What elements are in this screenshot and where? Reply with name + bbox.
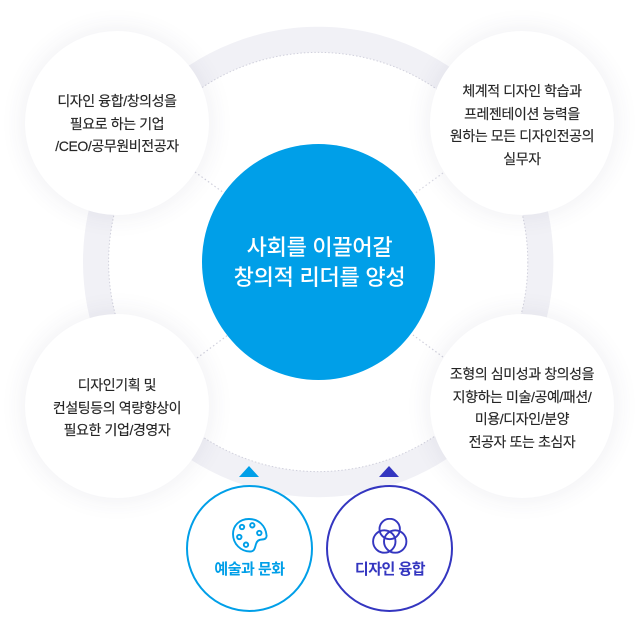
icon: overlapping circles xyxy=(372,518,408,554)
panel: top-right audience xyxy=(430,31,614,215)
center circle: main goal: 창의적 리더를 양성 xyxy=(234,264,405,290)
panel: bottom-right audience xyxy=(430,314,614,498)
panel: bottom-right audience: 조형의 심미성과 창의성을 xyxy=(450,366,594,382)
panel: top-right audience: 체계적 디자인 학습과 xyxy=(462,83,582,99)
badge: design convergence xyxy=(326,485,453,612)
panel: bottom-left audience: 필요한 기업/경영자 xyxy=(64,422,170,438)
panel: top-left audience: 디자인 융합/창의성을 xyxy=(57,93,177,109)
center circle: main goal xyxy=(202,144,435,380)
label: design convergence: 디자인 융합 xyxy=(355,561,425,578)
arrow: purple triangle xyxy=(379,466,399,477)
panel: top-left audience xyxy=(25,31,209,215)
center circle: main goal: 사회를 이끌어갈 xyxy=(247,234,392,260)
panel: bottom-left audience: 컨설팅등의 역량향상이 xyxy=(53,400,181,416)
panel: bottom-left audience: 디자인기획 및 xyxy=(78,377,156,393)
badge: art and culture xyxy=(186,485,313,612)
panel: bottom-right audience: 미용/디자인/분양 xyxy=(475,411,569,427)
panel: top-left audience: 필요로 하는 기업 xyxy=(70,116,164,132)
panel: top-right audience: 실무자 xyxy=(503,150,541,166)
label: art and culture: 예술과 문화 xyxy=(214,561,285,578)
panel: bottom-right audience: 지향하는 미술/공예/패션/ xyxy=(453,388,591,404)
panel: top-left audience: /CEO/공무원비전공자 xyxy=(55,138,179,154)
panel: bottom-right audience: 전공자 또는 초심자 xyxy=(469,434,575,450)
panel: top-right audience: 프레젠테이션 능력을 xyxy=(464,106,580,122)
panel: bottom-left audience xyxy=(25,314,209,498)
panel: top-right audience: 원하는 모든 디자인전공의 xyxy=(450,128,594,144)
icon: palette xyxy=(232,518,268,552)
arrow: blue triangle xyxy=(239,466,259,477)
